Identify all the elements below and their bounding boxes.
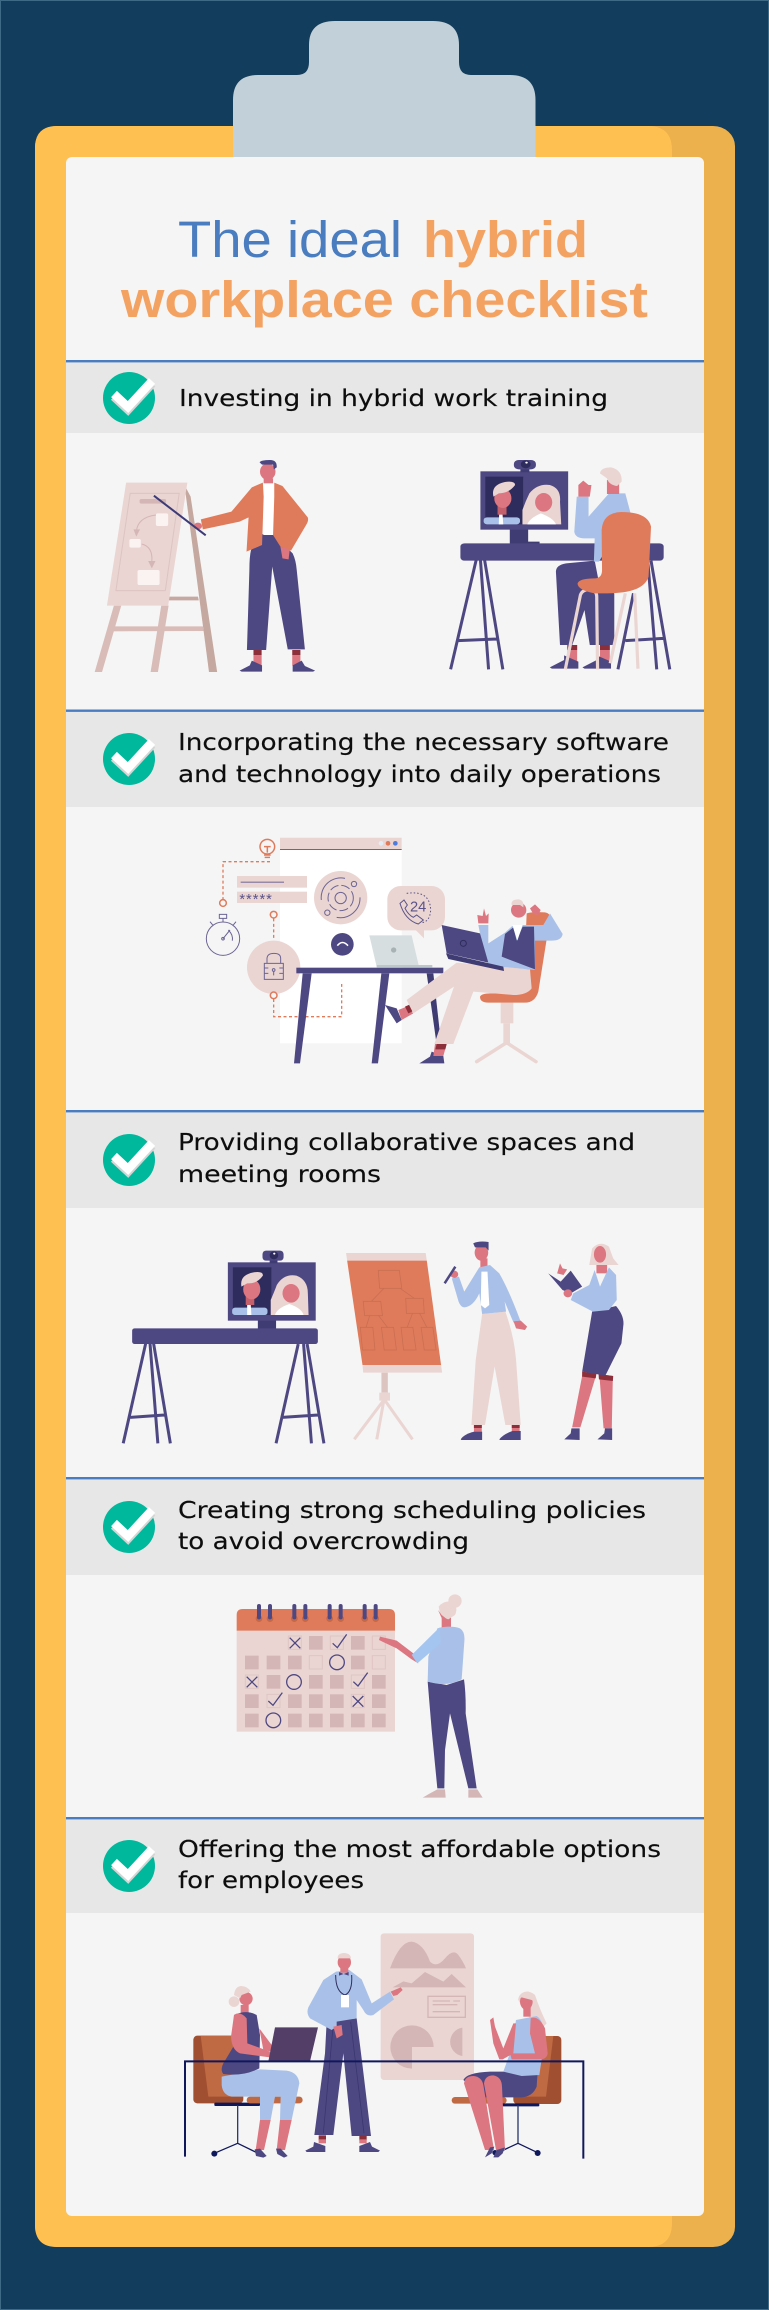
table bbox=[294, 968, 443, 1063]
chair bbox=[477, 912, 550, 1062]
app window bbox=[280, 838, 402, 1043]
icon: light bulb bbox=[260, 839, 275, 857]
left chair bbox=[193, 2036, 260, 2157]
dashed connectors bbox=[223, 862, 342, 1017]
text 4: Creating strong scheduling policies bbox=[178, 1498, 646, 1524]
icon: check 3 bbox=[103, 1134, 155, 1186]
presenter bbox=[154, 460, 315, 672]
chart board bbox=[381, 1933, 474, 2080]
checklist item 2 header bbox=[66, 710, 704, 807]
calendar day cells bbox=[245, 1636, 386, 1727]
title: workplace checklist bbox=[120, 271, 648, 328]
icon: check 5 bbox=[103, 1840, 155, 1892]
speech bubble 24 hours: 24 bbox=[410, 900, 426, 916]
illustration 3: collaborative spaces bbox=[123, 1242, 624, 1443]
clipboard clip bbox=[233, 21, 536, 157]
title bbox=[120, 211, 648, 328]
illustration 2: software and technology bbox=[206, 838, 563, 1063]
meeting table bbox=[185, 2061, 583, 2159]
woman with notebook bbox=[548, 1244, 624, 1440]
speech bubble 24 hours bbox=[387, 886, 445, 938]
man with pen bbox=[445, 1242, 527, 1440]
login fields bbox=[237, 876, 307, 908]
illustration 1: training bbox=[95, 460, 670, 672]
text 2: Incorporating the necessary software bbox=[178, 730, 669, 756]
silver laptop bbox=[369, 935, 432, 967]
text 5 bbox=[178, 1837, 661, 1894]
text 1: Investing in hybrid work training bbox=[179, 386, 608, 412]
title: The ideal bbox=[178, 211, 402, 268]
checklist item 5 header bbox=[66, 1817, 704, 1913]
icon: stopwatch bbox=[206, 914, 240, 955]
flip chart with org chart bbox=[346, 1253, 442, 1439]
checklist item 1 header bbox=[66, 360, 704, 433]
calendar bbox=[237, 1604, 395, 1732]
text 2 bbox=[178, 730, 669, 788]
icon: check 1 bbox=[103, 372, 155, 424]
text 4: to avoid overcrowding bbox=[178, 1529, 469, 1555]
seated man waving bbox=[550, 467, 651, 669]
text 3: Providing collaborative spaces and bbox=[178, 1130, 635, 1156]
text 3: meeting rooms bbox=[178, 1162, 381, 1188]
text 5: Offering the most affordable options bbox=[178, 1837, 661, 1863]
video call desk bbox=[451, 460, 670, 669]
calendar marks bbox=[247, 1634, 368, 1728]
text 2: and technology into daily operations bbox=[178, 762, 661, 788]
woman pointing at calendar bbox=[379, 1594, 483, 1798]
easel and flip chart bbox=[95, 483, 217, 672]
icon: gear bbox=[314, 871, 367, 924]
login fields: ***** bbox=[239, 892, 273, 908]
icon: check 2 bbox=[103, 733, 155, 785]
connector nodes bbox=[220, 900, 277, 999]
seated man with laptop bbox=[385, 899, 563, 1063]
icon: phone badge bbox=[331, 933, 354, 956]
right chair bbox=[452, 2036, 561, 2156]
standing presenter bbox=[305, 1953, 403, 2152]
text 5: for employees bbox=[178, 1868, 364, 1894]
illustration 4: scheduling calendar bbox=[237, 1594, 483, 1798]
title: hybrid bbox=[423, 211, 588, 268]
icon: check 4 bbox=[103, 1501, 155, 1553]
paper sheet bbox=[66, 157, 704, 2216]
text 3 bbox=[178, 1130, 635, 1188]
meeting desk with video screen bbox=[123, 1251, 324, 1443]
seated woman with laptop bbox=[222, 1986, 318, 2158]
checklist item 3 header bbox=[66, 1110, 704, 1208]
icon: lock bbox=[247, 941, 300, 994]
checklist item 4 header bbox=[66, 1477, 704, 1575]
illustration 5: affordable options meeting bbox=[185, 1933, 583, 2159]
seated woman talking bbox=[463, 1992, 548, 2157]
text 4 bbox=[178, 1498, 646, 1555]
